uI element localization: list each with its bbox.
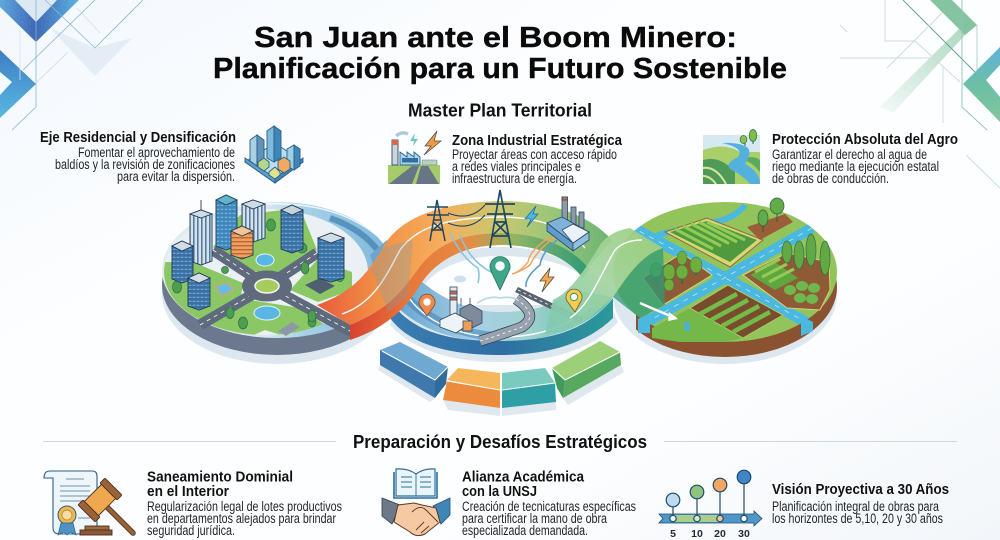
text block: Eje Residencial: para evitar la dispersión. xyxy=(117,169,235,184)
text block: Protección del Agro: de obras de conducción. xyxy=(772,171,889,186)
buildings xyxy=(172,195,344,310)
disc rim xyxy=(636,279,837,357)
tree patch xyxy=(747,198,793,240)
icon: timeline chart: 10 xyxy=(691,528,703,540)
text block: Zona Industrial: Zona Industrial Estratégica xyxy=(452,133,623,149)
text block: Saneamiento Dominial: en el Interior xyxy=(147,484,229,500)
top field xyxy=(665,218,763,267)
icon: factory and road xyxy=(388,131,441,184)
rim water outlets xyxy=(638,313,650,333)
icon: lightning bolt orange xyxy=(540,268,554,292)
central hole scenery xyxy=(450,233,584,341)
teal block xyxy=(502,368,556,416)
corner decoration: blue chevrons xyxy=(0,0,143,130)
central hole pale edge xyxy=(420,247,583,284)
title: San Juan ante el Boom Minero: xyxy=(254,22,737,54)
text block: Protección del Agro: Protección Absoluta del Agro xyxy=(772,132,958,148)
text block: Visión Proyectiva xyxy=(772,482,949,526)
left disc: residential city xyxy=(160,195,392,355)
trees xyxy=(172,219,344,329)
icon: lightning bolt blue xyxy=(525,206,538,227)
ponds xyxy=(254,306,280,320)
text block: Saneamiento Dominial: Regularización legal de lotes productivos xyxy=(147,499,342,514)
text block: Saneamiento Dominial: Saneamiento Dominial xyxy=(147,470,293,486)
central infinity diagram xyxy=(160,190,837,416)
map pin orange xyxy=(419,294,435,316)
text block: Eje Residencial: Fomentar el aprovechamiento de xyxy=(78,145,235,160)
text block: Alianza Académica: Creación de tecnicaturas específicas xyxy=(462,499,636,514)
text block: Alianza Académica: con la UNSJ xyxy=(462,484,537,500)
pylon left xyxy=(427,200,449,241)
text block: Visión Proyectiva: los horizontes de 5,10, 20 y 30 años xyxy=(772,511,943,526)
ribbon overlap shade xyxy=(372,240,413,312)
icon: timeline chart xyxy=(659,470,762,540)
text block: Alianza Académica: Alianza Académica xyxy=(462,470,585,486)
road curved xyxy=(480,299,530,341)
text block: Zona Industrial xyxy=(452,133,623,186)
text block: Protección del Agro: riego mediante la ejecución estatal xyxy=(772,159,939,174)
green blocks xyxy=(160,208,352,338)
text block: Saneamiento Dominial: en departamentos alejados para brindar xyxy=(147,511,336,526)
text block: Saneamiento Dominial xyxy=(147,470,342,538)
right disc: agriculture xyxy=(613,198,837,357)
bottom field xyxy=(652,285,783,342)
factory center xyxy=(440,287,482,333)
right field xyxy=(743,234,830,310)
disc rim xyxy=(162,277,352,355)
map pin yellow xyxy=(566,289,582,312)
text block: Protección del Agro: Garantizar el derecho al agua de xyxy=(772,147,927,162)
central ring: upper ribbon orange to green xyxy=(317,201,612,340)
text block: Zona Industrial: a redes viales principales e xyxy=(452,159,581,174)
icon: timeline chart: 20 xyxy=(714,528,726,540)
road straight xyxy=(515,287,584,323)
industrial plant top xyxy=(547,197,589,251)
roads and roundabout xyxy=(200,250,352,332)
icon: timeline chart: 30 xyxy=(738,528,750,540)
corner decoration: green chevrons xyxy=(840,0,1000,188)
left planted field xyxy=(643,251,712,305)
section heading: Master Plan Territorial: Master Plan Territorial xyxy=(408,100,592,120)
text block: Visión Proyectiva: Visión Proyectiva a 30 Años xyxy=(772,482,949,498)
green connecting ribbon xyxy=(545,228,678,334)
text block: Zona Industrial: infraestructura de energía. xyxy=(452,171,577,186)
orange block xyxy=(443,368,500,416)
diagram shadows xyxy=(162,224,837,364)
text block: Protección del Agro xyxy=(772,132,958,186)
text block: Alianza Académica: para certificar la mano de obra xyxy=(462,511,607,526)
text block: Eje Residencial: Eje Residencial y Densificación xyxy=(40,130,236,146)
title: Planificación para un Futuro Sostenible xyxy=(213,53,787,85)
central ring: lower band xyxy=(370,240,613,355)
text block: Visión Proyectiva: Planificación integral de obras para xyxy=(772,499,939,514)
text block: Eje Residencial xyxy=(40,130,236,184)
power lines xyxy=(448,205,485,226)
icon: deed, seal and gavel xyxy=(44,471,133,535)
disc surface xyxy=(162,202,392,338)
icon: city buildings xyxy=(245,126,303,183)
title xyxy=(213,22,787,85)
icon: book and handshake xyxy=(382,469,450,536)
blue block xyxy=(378,342,448,402)
text block: Saneamiento Dominial: seguridad jurídica. xyxy=(147,523,235,538)
disc surface xyxy=(613,202,837,342)
pylon right xyxy=(485,190,515,248)
map pin green xyxy=(490,257,510,290)
icon: timeline chart: 5 xyxy=(670,528,676,540)
text block: Zona Industrial: Proyectar áreas con acceso rápido xyxy=(452,147,617,162)
green block xyxy=(552,341,624,405)
text block: Eje Residencial: baldíos y la revisión de zonificaciones xyxy=(55,157,235,172)
section heading: Preparación y Desafíos: Preparación y Desafíos Estratégicos xyxy=(353,432,647,452)
text block: Alianza Académica xyxy=(462,470,636,538)
text block: Alianza Académica: especializada demandada. xyxy=(462,523,588,538)
icon: river and fields xyxy=(703,130,760,184)
